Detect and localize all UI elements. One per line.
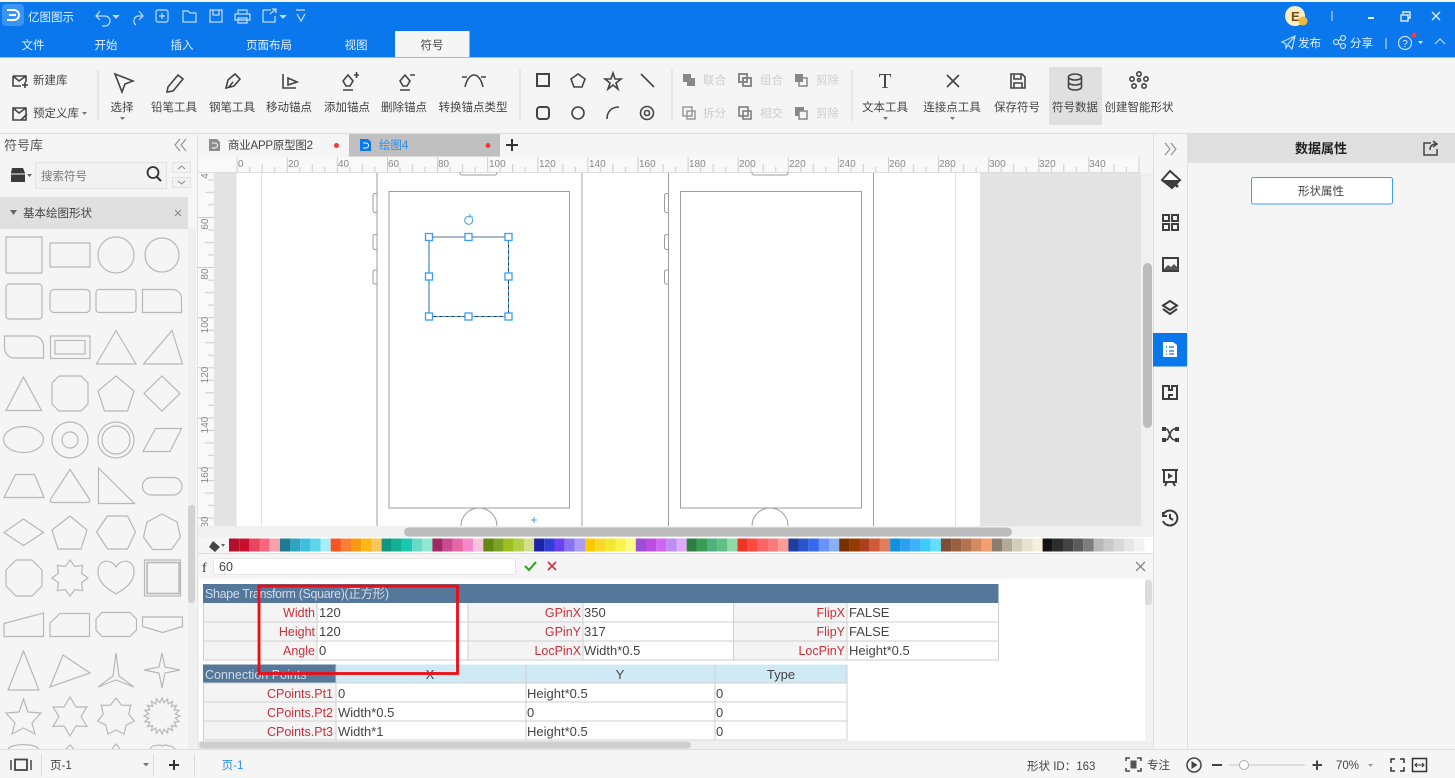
path tools: [110, 72, 508, 120]
icon: small plus marker: [531, 517, 537, 523]
horizontal ruler: 260: [889, 159, 906, 170]
menu tabs: 页面布局: [246, 39, 292, 52]
horizontal ruler: 40: [338, 159, 350, 170]
icon: expand: [1165, 143, 1176, 155]
vertical ruler: [198, 173, 214, 528]
selected square with handles: [426, 214, 512, 320]
panel heading: 符号库: [4, 138, 43, 153]
status bar: [0, 749, 1455, 778]
table: shape transform: Width: [283, 606, 315, 620]
table: shape transform: FlipY: [817, 625, 846, 639]
boolean tools: 剪除: [816, 106, 839, 120]
icon: collapse: [175, 139, 186, 151]
vertical ruler: 100: [200, 316, 211, 333]
horizontal ruler: 120: [539, 159, 556, 170]
table: shape transform: 350: [584, 605, 606, 620]
active icon: data sheet: [1153, 333, 1187, 366]
table: connection points: Y: [616, 667, 625, 682]
table: connection points: CPoints.Pt1: [267, 687, 333, 701]
horizontal ruler: 300: [989, 159, 1006, 170]
table scrollbars: [198, 579, 1153, 749]
table: shape transform: 317: [584, 624, 606, 639]
user avatar: [1285, 6, 1308, 26]
table: connection points: Height*0.5: [527, 686, 588, 701]
menu tabs: 视图: [344, 38, 368, 52]
table: connection points: X: [426, 667, 435, 682]
table: connection points: CPoints.Pt2: [267, 706, 333, 720]
icon: play: [1187, 758, 1201, 772]
vertical ruler: 140: [200, 416, 211, 433]
table: shape transform: Height: [279, 625, 316, 639]
left panel scrollbar: [188, 229, 196, 749]
table: shape transform: GPinX: [545, 606, 582, 620]
section header: basic shapes: [0, 197, 188, 229]
vertical ruler: 80: [200, 268, 211, 280]
table: connection points: 0: [527, 705, 534, 720]
boolean tools: 剪除: [816, 73, 839, 87]
right panel: data properties: [1188, 134, 1455, 749]
icon: rotate handle: [465, 214, 473, 224]
table: shape transform: FALSE: [849, 624, 890, 639]
drawing canvas: [214, 172, 1141, 526]
red highlight box: [259, 586, 458, 674]
table: connection points: Connection Points: [205, 668, 306, 682]
formula bar: f: [202, 561, 207, 576]
text, connection and data tools: 保存符号: [994, 100, 1040, 114]
app name: 亿图图示: [28, 11, 74, 24]
table: shape transform: Width*0.5: [584, 643, 640, 658]
path tools: 钢笔工具: [209, 100, 255, 114]
tab: 商业APP原型图2: [209, 138, 339, 152]
path tools: 铅笔工具: [151, 100, 197, 114]
right icon column: [1153, 134, 1188, 749]
zoom slider: 70%: [1336, 760, 1359, 772]
table: shape transform: 120: [319, 624, 341, 639]
icon: confirm: [525, 562, 536, 570]
path tools: 转换锚点类型: [438, 100, 508, 114]
window controls and share actions: [1282, 6, 1445, 50]
icon: fill bucket: [209, 541, 225, 552]
quick access icons: [96, 9, 305, 26]
table: connection points: Type: [767, 667, 795, 682]
tab: 商业APP原型图2: 商业APP原型图2: [228, 138, 313, 152]
menu tabs: 插入: [170, 38, 194, 52]
vertical ruler: 30: [200, 516, 211, 528]
phone wireframe 2: [664, 172, 874, 526]
table: shape transform: Shape Transform (Square)(正方形): [205, 586, 389, 601]
icon: connectors: [1162, 427, 1179, 442]
formula input: 60: [219, 560, 233, 574]
icon: export: [1424, 141, 1437, 155]
canvas horizontal scrollbar: [198, 526, 1141, 537]
active tab: 符号: [420, 38, 444, 52]
library buttons: [13, 73, 87, 120]
page navigator: [11, 754, 243, 777]
horizontal ruler: 340: [1089, 159, 1106, 170]
shape tools: [537, 73, 654, 120]
horizontal ruler: 100: [489, 159, 506, 170]
table: shape transform: LocPinX: [534, 644, 582, 658]
text, connection and data tools: 文本工具: [862, 100, 908, 114]
boolean tools: 相交: [760, 106, 783, 120]
section header: basic shapes: 基本绘图形状: [23, 206, 92, 220]
horizontal ruler: 140: [589, 159, 606, 170]
library search: 搜索符号: [41, 169, 87, 183]
table: shape transform: Angle: [283, 644, 315, 658]
horizontal ruler: 60: [388, 159, 400, 170]
vertical ruler: 160: [200, 466, 211, 483]
shape stencil grid: [4, 237, 182, 749]
icon: layers: [1163, 301, 1177, 314]
table: shape transform: 0: [319, 643, 326, 658]
text, connection and data tools: T: [879, 69, 892, 93]
table: shape transform: LocPinY: [798, 644, 846, 658]
horizontal ruler: 280: [939, 159, 956, 170]
panel heading: 数据属性: [1295, 141, 1347, 156]
colour palette: [198, 537, 1153, 553]
library buttons: 预定义库: [33, 106, 79, 120]
menu tabs: 文件: [22, 38, 44, 52]
horizontal ruler: 0: [238, 159, 244, 170]
table: shape transform: GPinY: [545, 625, 582, 639]
menu tabs: 开始: [94, 38, 118, 52]
page navigator: 页-1: [222, 760, 243, 772]
icon: grid: [1163, 215, 1178, 230]
vertical ruler: 4: [200, 173, 211, 179]
data tables area: [198, 579, 1153, 749]
icon: history: [1163, 510, 1177, 525]
table: connection points: CPoints.Pt3: [267, 725, 333, 739]
table: connection points: 0: [716, 724, 723, 739]
horizontal ruler: 180: [689, 159, 706, 170]
window controls and share actions: 发布: [1298, 36, 1321, 50]
title bar: [0, 2, 1455, 57]
path tools: 添加锚点: [324, 100, 370, 114]
formula bar: [198, 553, 1153, 579]
window controls and share actions: 分享: [1350, 36, 1373, 50]
icon: presentation: [1162, 470, 1178, 486]
library buttons: 新建库: [33, 73, 68, 87]
text, connection and data tools: 创建智能形状: [1104, 100, 1174, 114]
vertical ruler: 120: [200, 366, 211, 383]
phone wireframe 1: [373, 172, 873, 526]
table: connection points: Width*1: [338, 724, 384, 739]
icon: cancel: [548, 562, 556, 570]
focus mode: [1126, 758, 1170, 772]
page navigator: 页-1: [50, 760, 72, 772]
icon: page layout: [1163, 386, 1177, 399]
shape id: 形状 ID：163: [1027, 759, 1095, 773]
highlighted button: symbol data: [1049, 67, 1102, 125]
horizontal ruler: 160: [639, 159, 656, 170]
table: connection points: 0: [338, 686, 345, 701]
document tabs: [198, 134, 1153, 157]
icon: fill: [1162, 171, 1180, 188]
library search: [11, 162, 190, 188]
user avatar: E: [1291, 9, 1300, 24]
horizontal ruler: 80: [438, 159, 450, 170]
table: shape transform: FlipX: [817, 606, 846, 620]
horizontal ruler: [198, 157, 1141, 173]
left panel: symbol library: [0, 134, 198, 749]
table: shape transform: [203, 584, 999, 660]
menu tabs: [22, 31, 470, 57]
icon: image: [1163, 258, 1178, 271]
horizontal ruler: 220: [789, 159, 806, 170]
icon: add tab: [506, 139, 518, 151]
view controls: [1391, 758, 1426, 772]
path tools: 选择: [110, 100, 134, 114]
table: shape transform: 120: [319, 605, 341, 620]
path tools: 移动锚点: [266, 100, 312, 114]
highlighted button: symbol data: 符号数据: [1052, 100, 1098, 114]
focus mode: 专注: [1147, 758, 1170, 772]
vertical ruler: 60: [200, 218, 211, 230]
table: connection points: Height*0.5: [527, 724, 588, 739]
zoom slider: [1212, 760, 1373, 772]
horizontal ruler: 240: [839, 159, 856, 170]
active tab: [395, 31, 470, 57]
boolean tools: [683, 73, 839, 120]
horizontal ruler: 200: [739, 159, 756, 170]
text, connection and data tools: [862, 67, 1174, 125]
icon: close panel: [1136, 562, 1145, 571]
horizontal ruler: 320: [1039, 159, 1056, 170]
text, connection and data tools: 连接点工具: [923, 100, 981, 114]
horizontal ruler: 20: [288, 159, 300, 170]
tab: 绘图4: 绘图4: [379, 138, 409, 152]
table: connection points: 0: [716, 686, 723, 701]
window controls and share actions: ?: [1402, 39, 1408, 50]
canvas vertical scrollbar: [1141, 173, 1153, 553]
path tools: 删除锚点: [381, 100, 427, 114]
icon: app logo: [2, 4, 24, 26]
button: shape properties: [1252, 178, 1392, 204]
ribbon toolbar: [0, 57, 1455, 134]
table: connection points: Width*0.5: [338, 705, 394, 720]
table: connection points: [203, 664, 847, 740]
boolean tools: 联合: [703, 73, 726, 87]
table: shape transform: Height*0.5: [849, 643, 910, 658]
formula input: [214, 558, 516, 574]
boolean tools: 组合: [760, 73, 783, 87]
table: shape transform: FALSE: [849, 605, 890, 620]
boolean tools: 拆分: [703, 106, 726, 120]
button: shape properties: 形状属性: [1298, 184, 1344, 198]
tab: 绘图4: [349, 134, 500, 156]
table: connection points: 0: [716, 705, 723, 720]
